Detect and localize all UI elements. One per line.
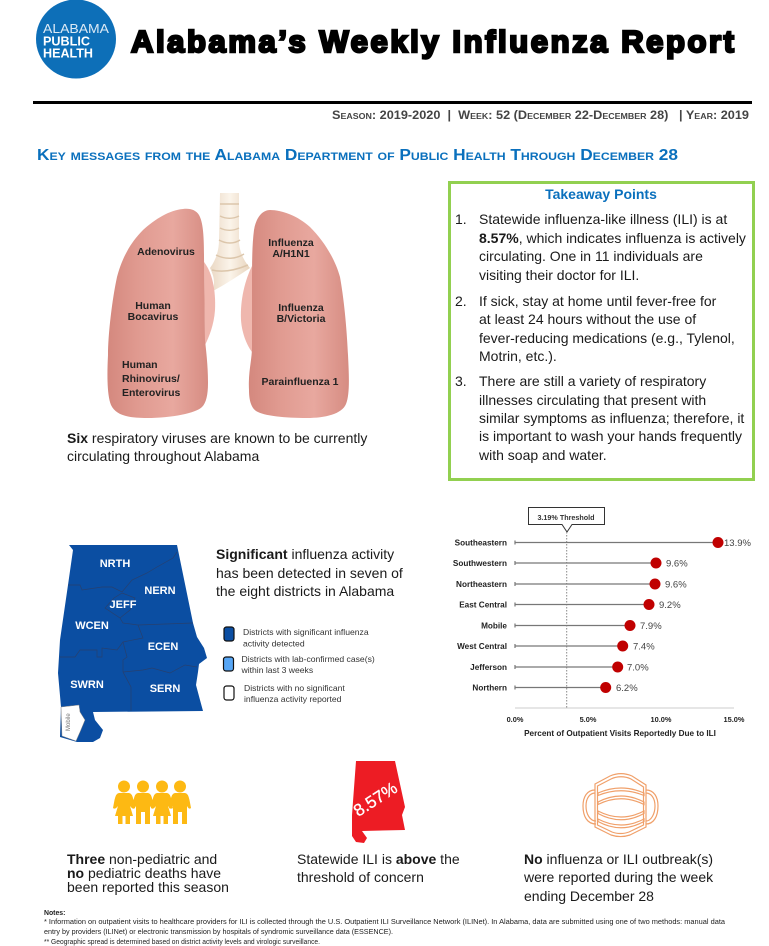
logo: Alabama Public Health	[36, 0, 116, 78]
panel: takeaway points: If sick, stay at home until fever-free for	[479, 293, 717, 309]
caption: outbreaks: No influenza or ILI outbreak(s)	[524, 851, 713, 867]
map legend: Districts with lab-confirmed case(s)	[242, 654, 375, 664]
panel: takeaway points: fever-reducing medications (e.g., Tylenol,	[479, 330, 735, 346]
lollipop chart: ILI by district: 7.4%	[633, 642, 655, 652]
caption: deaths: Three non-pediatric and	[67, 851, 217, 867]
map headline: Significant influenza activity	[216, 546, 394, 562]
season and week line: Season: 2019-2020 | Week: 52 (December 22-December 28) | Year: 2019	[332, 110, 749, 122]
lollipop chart: ILI by district: 7.0%	[627, 662, 649, 674]
lungs illustration with virus labels: Enterovirus	[122, 387, 181, 399]
lollipop chart: ILI by district: 15.0%	[724, 715, 745, 724]
notes: entry by providers (ILINet) or electronic transmission by hospitals of syndromic surveillance data (ESSENCE).	[44, 929, 393, 936]
caption: threshold: Statewide ILI is above the	[297, 851, 460, 867]
lollipop chart: ILI by district: 7.9%	[640, 621, 662, 632]
panel: takeaway points: Statewide influenza-like illness (ILI) is at	[479, 211, 727, 227]
lollipop chart: ILI by district: Northeastern	[456, 580, 507, 589]
lungs illustration with virus labels: Human	[135, 300, 171, 312]
panel: takeaway points: 3.	[455, 373, 467, 389]
lollipop chart: ILI by district: West Central	[457, 642, 507, 651]
lollipop chart: ILI by district: 6.2%	[616, 683, 638, 694]
lungs illustration with virus labels: Adenovirus	[137, 246, 195, 258]
caption: outbreaks: ending December 28	[524, 888, 654, 904]
panel: takeaway points: 1.	[455, 211, 467, 227]
panel: takeaway points: Motrin, etc.).	[479, 348, 557, 364]
caption: deaths: been reported this season	[67, 879, 229, 895]
lungs illustration with virus labels: Bocavirus	[128, 311, 179, 323]
panel: takeaway points: Takeaway Points	[545, 186, 657, 202]
icon: red Alabama with 8.57%: 8.57%	[350, 778, 401, 820]
panel: takeaway points: There are still a variety of respiratory	[479, 373, 706, 389]
map legend: influenza activity reported	[244, 694, 342, 704]
map: Alabama districts	[58, 545, 207, 742]
threshold callout	[528, 508, 604, 532]
lungs illustration with virus labels: A/H1N1	[272, 248, 310, 260]
map legend: activity detected	[243, 638, 305, 648]
trachea	[210, 193, 250, 291]
panel: takeaway points: circulating. One in 11 individuals are	[479, 248, 703, 264]
panel: takeaway points: at least 24 hours without the use of	[479, 311, 696, 327]
panel: takeaway points: illnesses circulating that present with	[479, 392, 706, 408]
left lung	[107, 209, 208, 418]
caption: threshold: threshold of concern	[297, 869, 424, 885]
notes: Notes:	[44, 910, 65, 917]
lollipop chart: ILI by district	[453, 508, 751, 738]
icon: red Alabama with 8.57%	[350, 761, 405, 843]
logo: Alabama Public Health: PUBLIC	[43, 34, 91, 48]
Mobile district (white)	[61, 705, 85, 741]
map legend	[224, 627, 375, 704]
lungs illustration with virus labels: Influenza	[268, 237, 314, 249]
lollipop chart: ILI by district: Jefferson	[470, 663, 507, 672]
lollipop chart: ILI by district: East Central	[459, 600, 507, 610]
icon: face mask	[583, 774, 658, 836]
caption: deaths: pediatric deaths have	[88, 865, 221, 881]
threshold callout: 3.19% Threshold	[537, 513, 595, 522]
lungs illustration with virus labels: B/Victoria	[277, 313, 326, 325]
right lung	[249, 210, 349, 418]
map legend: Districts with no significant	[244, 683, 345, 693]
panel: takeaway points: visiting their doctor for ILI.	[479, 267, 639, 283]
icon: four people	[113, 780, 191, 824]
lollipop chart: ILI by district: 10.0%	[651, 715, 672, 724]
lollipop chart: ILI by district: 13.9%	[724, 538, 751, 549]
lollipop chart: ILI by district: 5.0%	[580, 715, 597, 724]
map headline: the eight districts in Alabama	[216, 583, 394, 599]
map: Alabama districts: SERN	[150, 683, 180, 695]
caption: deaths: no	[67, 865, 84, 881]
lungs caption: circulating throughout Alabama	[67, 448, 259, 464]
title: Alabama’s Weekly Influenza Report	[131, 24, 734, 59]
panel: takeaway points: 2.	[455, 293, 467, 309]
logo: Alabama Public Health: HEALTH	[43, 46, 93, 60]
lungs illustration with virus labels: Parainfluenza 1	[261, 376, 339, 388]
lollipop chart: ILI by district: Mobile	[481, 622, 507, 630]
lollipop chart: ILI by district: Southwestern	[453, 559, 507, 568]
section heading: Key messages from the Alabama Department of Public Health Through December 28	[37, 147, 678, 164]
map headline: has been detected in seven of	[216, 565, 403, 581]
panel: takeaway points: similar symptoms as influenza; therefore, it	[479, 410, 744, 426]
lollipop chart: ILI by district: 9.6%	[665, 580, 687, 590]
map legend: Districts with significant influenza	[243, 627, 369, 637]
map: Alabama districts: NERN	[144, 585, 176, 597]
caption: outbreaks: were reported during the week	[523, 869, 714, 885]
notes	[44, 910, 725, 946]
map legend: within last 3 weeks	[240, 665, 313, 675]
lungs illustration with virus labels	[107, 193, 349, 418]
map: Alabama districts: NRTH	[100, 558, 130, 570]
map: Alabama districts: WCEN	[75, 620, 109, 632]
inner lobes	[204, 262, 215, 345]
lollipop chart: ILI by district: 9.6%	[666, 558, 688, 570]
lungs illustration with virus labels: Influenza	[278, 302, 324, 314]
lollipop chart: ILI by district: 9.2%	[659, 600, 681, 611]
map: Alabama districts: ECEN	[148, 641, 178, 653]
lollipop chart: ILI by district: Southeastern	[455, 538, 507, 548]
notes: ** Geographic spread is determined based on district activity levels and virologic surveillance.	[44, 939, 320, 946]
panel: takeaway points: with soap and water.	[478, 447, 607, 463]
panel: takeaway points	[450, 182, 754, 480]
panel: takeaway points: 8.57%, which indicates influenza is actively	[479, 230, 746, 246]
logo: Alabama Public Health: ALABAMA	[43, 21, 109, 36]
lollipop chart: ILI by district: 0.0%	[507, 715, 524, 724]
panel: takeaway points: is important to wash your hands frequently	[479, 428, 742, 444]
header rule	[33, 101, 752, 104]
lungs caption: Six respiratory viruses are known to be currently	[67, 430, 367, 446]
lungs illustration with virus labels: Human	[122, 359, 158, 371]
map: Alabama districts: JEFF	[110, 599, 137, 611]
map: Alabama districts: SWRN	[70, 679, 104, 691]
lollipop chart: ILI by district: Percent of Outpatient Visits Reportedly Due to ILI	[524, 729, 716, 738]
map: Alabama districts: Mobile	[66, 713, 72, 731]
lungs illustration with virus labels: Rhinovirus/	[122, 373, 180, 385]
lollipop chart: ILI by district: Northern	[472, 684, 507, 692]
notes: * Information on outpatient visits to healthcare providers for ILI is collected through the U.S. Outpatient ILI Surveillance Network (ILINet). In Alabama, data are submitted using one of two methods: manual data	[44, 919, 725, 926]
